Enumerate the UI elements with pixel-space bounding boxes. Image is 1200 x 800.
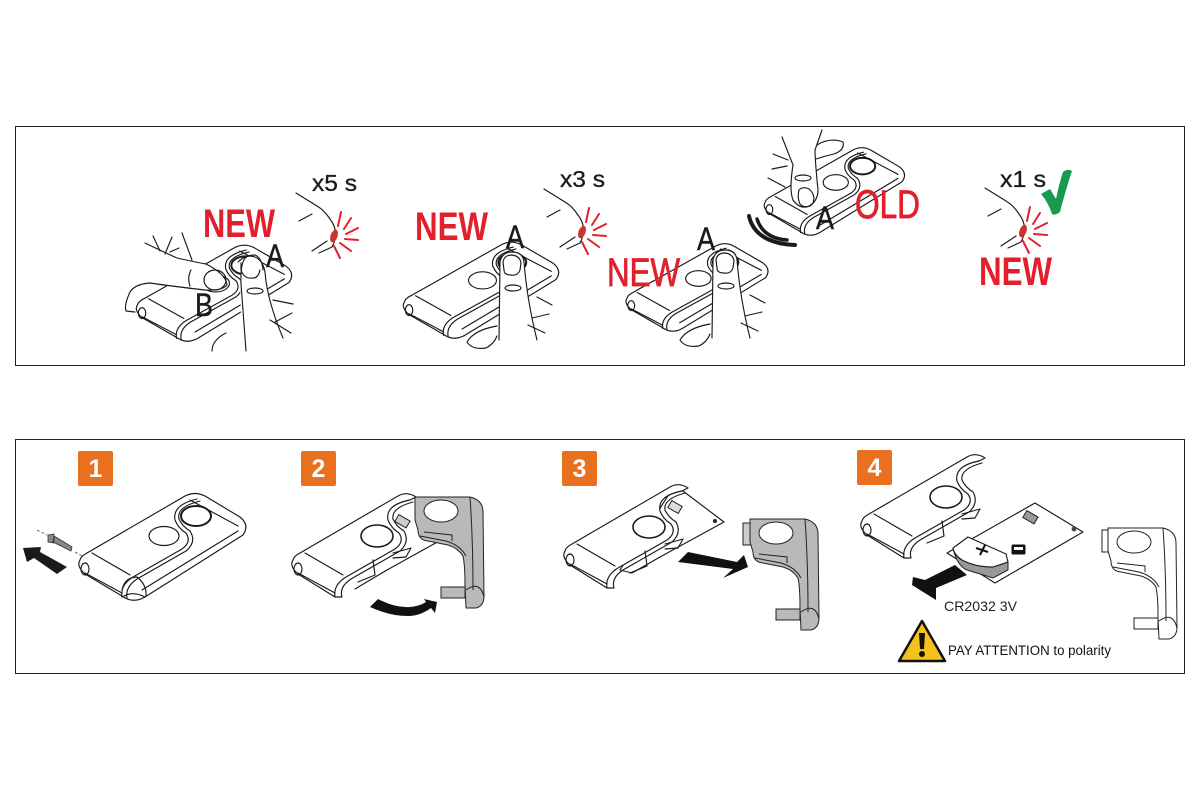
icon: flashing LED	[544, 189, 606, 254]
illustration: remote shell	[861, 455, 985, 558]
label: polarity warning: PAY ATTENTION to polarity	[948, 643, 1111, 658]
illustration: opened remote	[292, 494, 484, 608]
label: NEW: NEW	[203, 202, 275, 246]
panel: battery replacement steps	[16, 440, 1184, 674]
label: A: A	[697, 221, 716, 257]
step: confirm on new remote	[979, 166, 1072, 294]
illustration: circuit board	[947, 503, 1083, 583]
step 2: open cover	[292, 451, 484, 616]
arrow: pull apart	[678, 552, 748, 578]
step 1: remove screw	[23, 451, 246, 600]
step: press A on new remote for 3 seconds	[403, 166, 606, 348]
badge: 3	[562, 451, 597, 486]
illustration: remote	[403, 242, 559, 338]
icon: finger pressing B	[126, 233, 227, 312]
illustration: remote held with both buttons	[136, 245, 292, 341]
step: press A and B for 5 seconds	[126, 170, 358, 351]
badge: 2	[301, 451, 336, 486]
badge: 2: 2	[312, 455, 325, 483]
label: A: A	[266, 238, 285, 274]
illustration: remote	[626, 244, 768, 331]
badge: 3: 3	[573, 455, 586, 483]
illustration: removed cover	[743, 519, 819, 630]
step 4: replace battery	[857, 450, 1177, 661]
icon: flashing LED	[296, 193, 358, 258]
badge: 4	[857, 450, 892, 485]
arrow: swing cover	[370, 599, 437, 616]
label: B: B	[195, 287, 213, 323]
label: A: A	[506, 219, 525, 255]
label: NEW: NEW	[415, 205, 488, 249]
panel: pairing steps	[16, 126, 1184, 366]
illustration: remote with board	[564, 485, 724, 588]
icon: finger pressing from above	[768, 130, 843, 207]
step: hold A on new remote	[607, 221, 768, 346]
label: NEW: NEW	[607, 251, 680, 295]
icon: finger pressing A	[212, 255, 293, 351]
illustration: closed remote	[37, 494, 246, 600]
icon: flashing LED	[985, 188, 1047, 253]
illustration: CR2032 battery	[953, 537, 1008, 578]
icon: finger pressing A	[680, 250, 765, 346]
badge: 1	[78, 451, 113, 486]
arrow: remove battery	[912, 565, 967, 600]
icon: warning triangle	[899, 621, 945, 661]
illustration: remote	[764, 148, 905, 235]
icon: green check mark	[1041, 170, 1072, 215]
badge: 1: 1	[89, 455, 103, 483]
label: x5 s: x5 s	[312, 170, 357, 196]
label: NEW: NEW	[979, 250, 1052, 294]
label: x3 s: x3 s	[560, 166, 605, 192]
icon: finger pressing A	[467, 252, 552, 348]
label: A: A	[816, 200, 835, 236]
icon: motion arcs	[749, 216, 795, 245]
arrow: remove screw	[23, 547, 67, 574]
label: OLD: OLD	[855, 183, 920, 227]
illustration: removed cover	[1102, 528, 1177, 639]
step 3: separate cover	[562, 451, 819, 630]
step: press A on old remote	[749, 130, 920, 245]
label: x1 s: x1 s	[1000, 166, 1046, 192]
label: CR2032 3V: CR2032 3V	[944, 598, 1018, 614]
badge: 4: 4	[868, 454, 882, 482]
